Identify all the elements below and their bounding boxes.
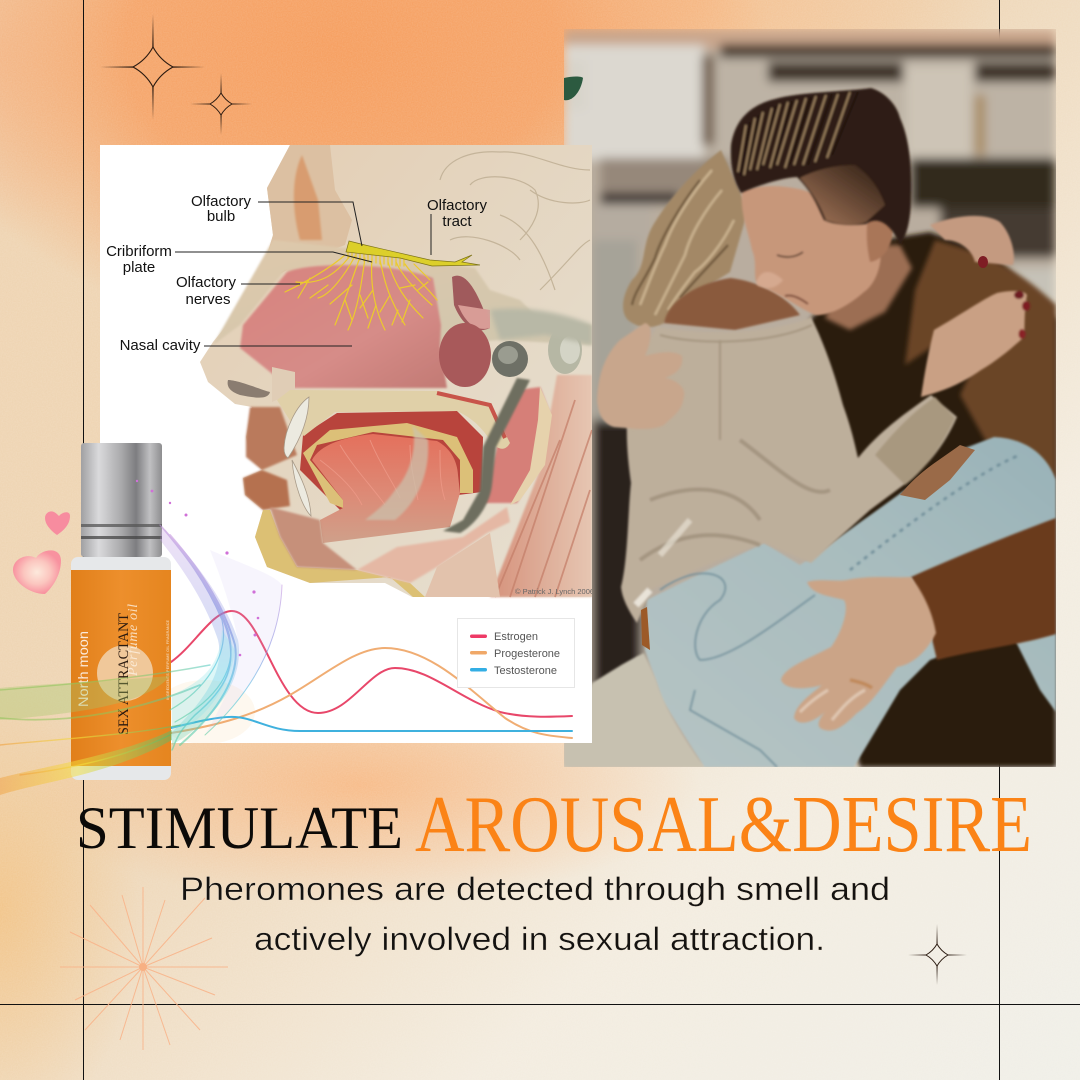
anatomy labels: nerves [185, 291, 231, 308]
chin fat [255, 510, 425, 597]
anatomy labels [106, 193, 488, 354]
hormone line chart [171, 611, 572, 738]
yellow band [0, 730, 172, 795]
anatomy labels: Olfactory [176, 274, 237, 291]
forehead tissue [267, 145, 352, 272]
cream glow [155, 680, 255, 744]
gland edge [510, 387, 552, 505]
chart legend: Testosterone [494, 665, 557, 677]
brand name: North moon [75, 631, 91, 707]
salivary glands [357, 507, 510, 583]
testosterone curve [171, 717, 572, 731]
tongue [312, 434, 460, 543]
man's hand on her back [597, 323, 684, 429]
nasopharynx [439, 323, 491, 387]
lower lip muscle [243, 470, 290, 510]
yellow lines [0, 725, 180, 775]
green band [0, 676, 170, 720]
anatomy labels: tract [442, 213, 472, 230]
photo background room [564, 29, 1056, 767]
chin muscle [270, 507, 357, 570]
icon: orange starburst [60, 887, 228, 1050]
man's hand on her thigh [781, 577, 936, 731]
sphenoid sinus [452, 276, 490, 330]
ingredients small print: INGREDIENTS PERFUME OIL FRAGRANCE [166, 619, 170, 700]
tongue yellow outline [303, 423, 473, 508]
grey tissue band [490, 309, 592, 345]
neck muscle [490, 375, 592, 597]
product name: SEX ATTRACTANT [116, 613, 132, 735]
knit blanket [564, 653, 704, 767]
woman's bare shoulder [664, 278, 800, 330]
cap bands [81, 524, 162, 539]
palate [277, 390, 510, 449]
first line: Pheromones are detected through smell and [180, 871, 890, 907]
man's neck [825, 245, 912, 330]
woman's arm and hand over his shoulder [930, 216, 1014, 265]
watermark: © Patrick J. Lynch 2006 [515, 587, 594, 596]
anatomy labels: plate [123, 259, 155, 276]
man's face [742, 186, 893, 315]
anatomy labels: Olfactory [427, 197, 488, 214]
knee rip [900, 445, 975, 500]
eustachian tube [443, 378, 530, 533]
red oral cavity [300, 411, 483, 510]
olfactory nerves [285, 245, 437, 330]
brain folds [440, 152, 590, 290]
pink pharynx [483, 387, 550, 503]
anatomy labels: bulb [207, 208, 235, 225]
jeans [645, 437, 1056, 767]
red nail [978, 256, 988, 268]
woman's sweater [621, 317, 957, 623]
bottle cap [81, 443, 162, 557]
woman's hair [623, 150, 748, 327]
perfume oil script: Perfume oil [126, 604, 141, 677]
purple blue lines [160, 525, 282, 750]
chart legend [458, 618, 574, 688]
colour swoosh [0, 480, 282, 795]
sparkle dots [136, 480, 259, 656]
label leader lines [175, 202, 431, 346]
man's torso [790, 232, 1056, 767]
ear canal [548, 336, 582, 374]
palate soft tissue [437, 393, 505, 438]
icon: large sparkle [100, 14, 205, 120]
orange label [71, 570, 171, 766]
neck muscle streaks [495, 400, 592, 597]
woman's hand on his shoulder [921, 291, 1030, 397]
purple blue fan [160, 527, 239, 745]
chart legend: Estrogen [494, 631, 538, 643]
nasal cavity [240, 265, 447, 388]
leather belt [641, 607, 650, 650]
head anatomy illustration [200, 145, 594, 597]
incisor teeth [284, 397, 309, 458]
estrogen curve [171, 611, 572, 717]
anatomy labels: Nasal cavity [120, 337, 201, 354]
anatomy labels: Olfactory [191, 193, 252, 210]
progesterone curve [171, 648, 572, 738]
skull and brain tissue [200, 145, 592, 597]
chart legend: Progesterone [494, 648, 560, 660]
product bottle [71, 443, 171, 780]
white panel background [100, 145, 592, 743]
body text [180, 871, 890, 957]
icon: sparkle lower right [908, 924, 967, 985]
photo: embracing couple [564, 29, 1056, 767]
man's hair [731, 88, 911, 245]
olfactory bulb and tract [346, 241, 480, 266]
jeans pocket seams and rip [660, 455, 1020, 767]
nose outer bone [213, 240, 592, 345]
second line: actively involved in sexual attraction. [254, 921, 825, 957]
label circle [97, 645, 153, 701]
tendon under jaw [425, 533, 500, 597]
man's shoulder, brown top [905, 240, 1056, 520]
icon: small sparkle [190, 73, 252, 135]
bottle body [71, 557, 171, 780]
upper lip muscle [246, 407, 297, 470]
green lines [0, 665, 210, 720]
tongue muscle lines [320, 440, 445, 505]
title [76, 779, 1032, 869]
icon: small heart [45, 511, 70, 535]
plant leaf [564, 76, 583, 100]
title word: stimulate: STIMULATE [76, 795, 403, 861]
outer glow arc [205, 550, 282, 735]
panel: anatomy and hormone chart [100, 145, 594, 744]
teal fan [172, 630, 235, 735]
man's sleeve [911, 518, 1056, 660]
icon: large heart [13, 550, 61, 594]
nostril [228, 380, 270, 398]
grey translucent streak [365, 425, 428, 520]
anatomy labels: Cribriform [106, 243, 172, 260]
